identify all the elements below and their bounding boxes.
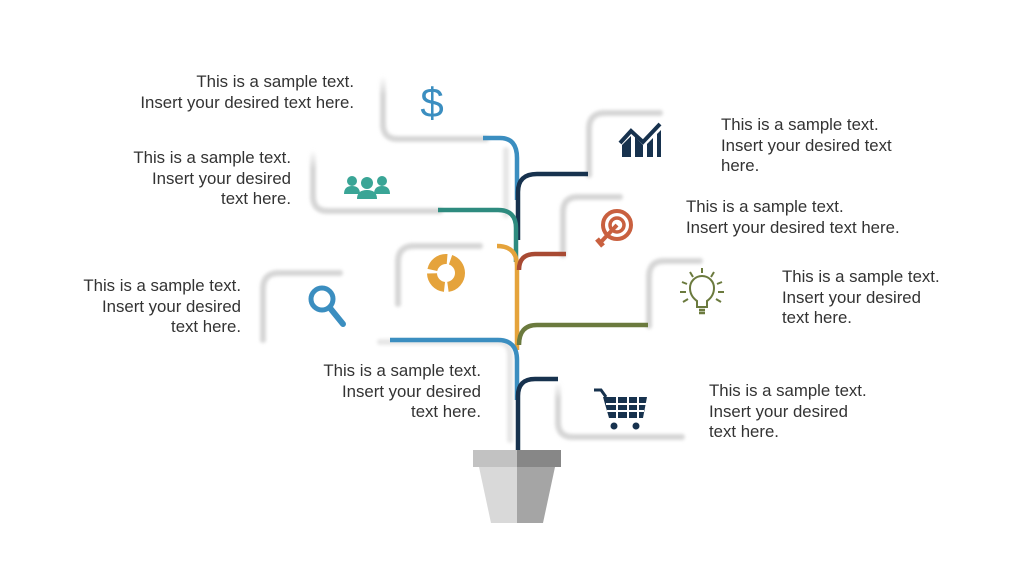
icon: magnifier	[311, 288, 343, 324]
text: bulb: Insert your desired	[782, 288, 921, 306]
text: target: Insert your desired text here.	[686, 218, 900, 236]
text: bottom left: Insert your desired	[342, 382, 481, 400]
text: chart: Insert your desired text	[721, 136, 892, 154]
icon: bulb	[680, 268, 724, 313]
text: search	[83, 276, 241, 336]
icon: donut	[432, 259, 460, 287]
icon: target	[597, 211, 631, 246]
text: bulb	[782, 267, 940, 327]
text: target: This is a sample text.	[686, 197, 844, 216]
icon: dollar: $	[420, 79, 444, 126]
card shadows	[263, 76, 748, 440]
pot	[473, 450, 561, 523]
text: people: Insert your desired	[152, 168, 291, 188]
text: cart: text here.	[709, 422, 779, 441]
text: dollar: Insert your desired text here.	[140, 92, 354, 112]
text: bulb: text here.	[782, 308, 852, 327]
icon: people	[344, 176, 390, 199]
text: cart	[709, 381, 867, 441]
text: bottom left: text here.	[411, 402, 481, 421]
text: chart: here.	[721, 156, 759, 175]
text: cart: Insert your desired	[709, 402, 848, 420]
text: search: This is a sample text.	[83, 276, 241, 295]
text: target	[686, 197, 900, 236]
icon: chart	[620, 124, 661, 157]
text: dollar	[140, 72, 354, 112]
text: bottom left: This is a sample text.	[323, 361, 481, 380]
text: chart	[721, 115, 892, 175]
text: people	[133, 148, 291, 208]
tree branches	[390, 138, 648, 452]
text: cart: This is a sample text.	[709, 381, 867, 400]
text: bottom left	[323, 361, 481, 421]
text: search: Insert your desired	[102, 296, 241, 316]
text: chart: This is a sample text.	[721, 115, 879, 134]
text: people: text here.	[221, 189, 291, 208]
text: search: text here.	[171, 317, 241, 336]
text: people: This is a sample text.	[133, 148, 291, 167]
icon: cart	[594, 390, 647, 430]
text: bulb: This is a sample text.	[782, 267, 940, 286]
text: dollar: This is a sample text.	[196, 72, 354, 91]
